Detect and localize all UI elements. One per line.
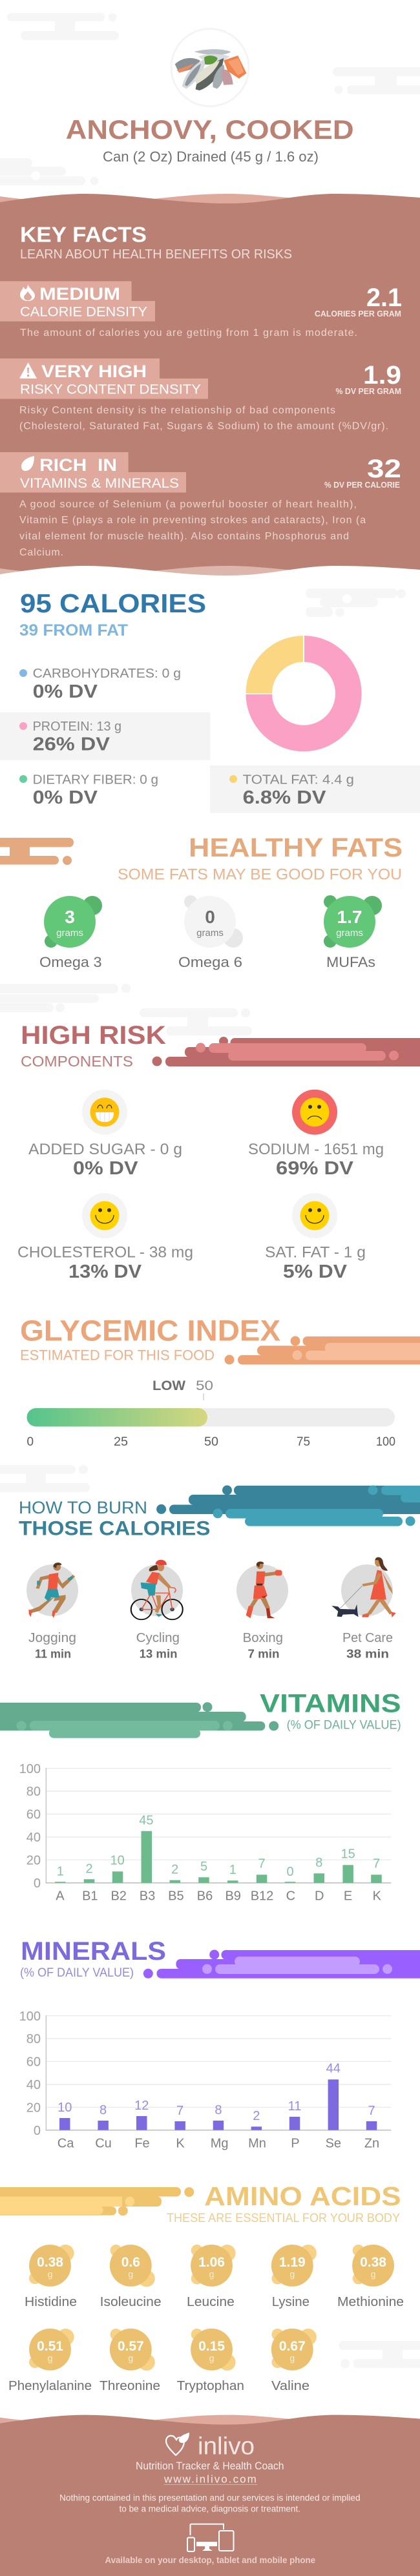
gauge scale: 75 — [297, 1435, 310, 1449]
panel: footer — [0, 2415, 420, 2576]
valine: g — [289, 2353, 295, 2363]
y axis labels: 40 — [26, 2078, 41, 2092]
leucine — [187, 2245, 236, 2309]
lysine: 1.19 — [279, 2255, 306, 2270]
background cloud left — [0, 158, 98, 185]
category labels: Cu — [95, 2136, 112, 2150]
saturated fat: 5% DV — [283, 1262, 348, 1282]
category labels: K — [373, 1889, 382, 1904]
gauge bar — [27, 1408, 395, 1426]
lysine: Lysine — [272, 2295, 310, 2309]
category labels: A — [56, 1889, 65, 1904]
fact: risky content density: % DV PER GRAM — [336, 387, 401, 396]
heading: AMINO ACIDS — [204, 2181, 401, 2211]
activity: pet care — [331, 1557, 396, 1661]
heading: MINERALS — [21, 1937, 166, 1966]
fact: vitamins and minerals: 32 — [367, 455, 401, 483]
category labels: Se — [326, 2136, 341, 2150]
isoleucine: g — [128, 2269, 133, 2279]
methionine — [337, 2245, 404, 2309]
valine: Valine — [271, 2379, 310, 2393]
methionine: g — [371, 2269, 375, 2279]
bars — [55, 1831, 382, 1883]
icon: flame — [20, 284, 35, 301]
fact: vitamins and minerals: VITAMINS & MINERALS — [20, 476, 179, 491]
saturated fat — [265, 1193, 366, 1282]
isoleucine: 0.6 — [121, 2255, 140, 2270]
subheading: COMPONENTS — [21, 1053, 133, 1070]
icon: cyclist — [131, 1560, 183, 1619]
mufas: grams — [336, 928, 363, 939]
top wave back — [0, 194, 295, 213]
activity: pet care: Pet Care — [342, 1631, 393, 1645]
subheading: (% OF DAILY VALUE) — [20, 1966, 134, 1980]
phenylalanine: Phenylalanine — [8, 2379, 92, 2393]
category labels: B9 — [225, 1889, 241, 1904]
lysine — [271, 2245, 317, 2309]
category labels: B12 — [251, 1889, 273, 1904]
food image circle — [171, 28, 249, 106]
cholesterol: CHOLESTEROL - 38 mg — [17, 1244, 193, 1262]
subheading: (% OF DAILY VALUE) — [287, 1719, 401, 1732]
leucine: 1.06 — [198, 2255, 225, 2270]
value labels: 10 — [58, 2101, 72, 2115]
tagline: Nutrition Tracker & Health Coach — [136, 2460, 284, 2472]
phenylalanine: g — [48, 2353, 52, 2363]
background cloud — [306, 588, 406, 617]
valine: 0.67 — [279, 2339, 306, 2354]
icon: grinning face — [90, 1097, 119, 1127]
added sugar — [28, 1090, 182, 1179]
panel: header — [0, 13, 420, 185]
subheading: THESE ARE ESSENTIAL FOR YOUR BODY — [167, 2212, 400, 2225]
heading line 2: THOSE CALORIES — [19, 1516, 211, 1539]
fact: calorie density: CALORIE DENSITY — [20, 305, 147, 320]
y axis labels: 60 — [26, 2055, 41, 2070]
mufas: 1.7 — [337, 907, 362, 927]
band background — [0, 194, 420, 578]
omega 3 — [39, 896, 102, 970]
disclaimer: to be a medical advice, diagnosis or treatment. — [119, 2504, 300, 2514]
sodium: SODIUM - 1651 mg — [248, 1141, 384, 1158]
fact: vitamins and minerals: % DV PER CALORIE — [324, 481, 400, 490]
icon: boxer — [246, 1561, 282, 1618]
decoration — [0, 2187, 194, 2216]
category labels: B5 — [168, 1889, 184, 1904]
threonine: Threonine — [100, 2379, 160, 2393]
legend: dietary fiber: DIETARY FIBER: 0 g — [33, 773, 158, 787]
y axis labels: 20 — [26, 1854, 41, 1868]
value labels: 2 — [85, 1862, 93, 1876]
title: ANCHOVY, COOKED — [66, 114, 354, 145]
donut chart — [246, 636, 362, 751]
gauge scale: 100 — [376, 1435, 395, 1449]
gauge reading: LOW — [152, 1378, 185, 1393]
value labels: 15 — [341, 1847, 355, 1862]
y axis labels: 40 — [26, 1831, 41, 1845]
legend: carbohydrates: 0% DV — [33, 681, 98, 702]
fact: risky content density: 1.9 — [363, 361, 401, 390]
value labels: 5 — [200, 1860, 207, 1874]
heading: HIGH RISK — [21, 1021, 167, 1050]
omega 3: Omega 3 — [39, 954, 102, 970]
category labels: E — [344, 1889, 352, 1904]
availability note: Available on your desktop, tablet and mobile phone — [105, 2555, 315, 2565]
methionine: 0.38 — [360, 2255, 386, 2270]
isoleucine — [100, 2245, 162, 2309]
heading: VITAMINS — [260, 1690, 401, 1718]
icon: sad face — [300, 1097, 330, 1127]
value labels: 2 — [171, 1862, 178, 1876]
icon: devices — [187, 2524, 234, 2551]
y axis labels — [19, 2010, 41, 2138]
subheading: 39 FROM FAT — [19, 621, 128, 639]
disclaimer — [59, 2493, 361, 2514]
cholesterol: 13% DV — [68, 1262, 142, 1282]
icon: woman walking dog — [331, 1557, 396, 1617]
histidine: g — [48, 2269, 52, 2279]
decoration — [0, 1702, 278, 1738]
value labels: 1 — [57, 1864, 64, 1878]
decoration — [143, 1949, 420, 1979]
y axis labels: 20 — [26, 2101, 41, 2115]
website link: www.inlivo.com — [163, 2473, 257, 2485]
category labels: P — [291, 2136, 300, 2150]
category labels: Ca — [58, 2136, 74, 2150]
gauge scale — [27, 1435, 395, 1449]
panel: how to burn — [0, 1465, 420, 1661]
threonine — [100, 2329, 160, 2393]
heading: 95 CALORIES — [20, 588, 206, 618]
legend: carbohydrates: CARBOHYDRATES: 0 g — [33, 667, 181, 681]
value labels: 0 — [286, 1865, 294, 1879]
category labels: D — [315, 1889, 324, 1904]
leucine: Leucine — [187, 2295, 235, 2309]
bars — [59, 2079, 377, 2130]
background cloud right — [333, 67, 420, 94]
fact: risky content density: (Cholesterol, Saturated Fat, Sugars & Sodium) to the amount (%DV/gr). — [19, 421, 388, 432]
bottom wave back — [0, 566, 295, 579]
value labels: 10 — [110, 1854, 125, 1868]
value labels: 8 — [215, 2103, 222, 2117]
methionine: Methionine — [337, 2295, 404, 2309]
icon: fish — [175, 49, 246, 90]
heading: KEY FACTS — [20, 223, 147, 247]
activity: cycling: Cycling — [136, 1631, 180, 1645]
bottom wave front — [0, 566, 420, 579]
legend: total fat: TOTAL FAT: 4.4 g — [243, 773, 354, 787]
omega 6: Omega 6 — [178, 954, 242, 970]
value labels: 2 — [253, 2109, 260, 2123]
tryptophan: 0.15 — [198, 2339, 225, 2354]
background clouds — [0, 984, 252, 1035]
legend: protein: 26% DV — [33, 734, 110, 755]
category labels: Fe — [134, 2136, 150, 2150]
panel: minerals — [19, 1937, 420, 2150]
tryptophan — [177, 2329, 244, 2393]
decoration — [156, 1486, 420, 1526]
fact: vitamins and minerals: Calcium. — [19, 547, 63, 558]
cholesterol — [17, 1193, 193, 1282]
category labels: Zn — [364, 2136, 379, 2150]
fact: vitamins and minerals: Vitamin E (plays a role in preventing strokes and cataracts), Iron (a — [19, 515, 366, 526]
value labels: 44 — [326, 2062, 341, 2076]
activity: pet care: 38 min — [346, 1648, 389, 1661]
activity: boxing: 7 min — [248, 1648, 279, 1661]
fact: calorie density: CALORIES PER GRAM — [315, 309, 401, 318]
omega 6: grams — [196, 928, 224, 939]
panel: vitamins — [0, 1690, 401, 1904]
y axis labels: 0 — [34, 2124, 41, 2138]
activity: boxing — [236, 1561, 288, 1661]
footer wave back — [0, 2415, 295, 2434]
gauge scale: 0 — [27, 1435, 34, 1449]
subheading: ESTIMATED FOR THIS FOOD — [20, 1347, 215, 1364]
logo: inlivo — [198, 2433, 255, 2460]
omega 6 — [178, 895, 243, 970]
y axis labels: 80 — [26, 1785, 41, 1799]
heading line 1: HOW TO BURN — [19, 1498, 147, 1517]
value labels: 45 — [139, 1813, 154, 1827]
tryptophan: Tryptophan — [177, 2379, 244, 2393]
sodium: 69% DV — [276, 1158, 354, 1179]
logo — [166, 2433, 255, 2460]
activity: jogging: Jogging — [28, 1631, 76, 1645]
decoration — [225, 1336, 420, 1364]
legend: carbohydrates — [19, 667, 181, 702]
value labels: 7 — [368, 2104, 375, 2118]
value labels: 12 — [134, 2099, 149, 2113]
legend: dietary fiber — [19, 773, 158, 808]
bar chart: minerals — [19, 2010, 391, 2150]
legend: total fat — [229, 773, 354, 808]
fact: risky content density: RISKY CONTENT DENSITY — [20, 382, 201, 397]
omega 6: 0 — [205, 907, 215, 927]
tryptophan: g — [209, 2353, 214, 2363]
category labels: Mn — [248, 2136, 266, 2150]
panel: calories — [0, 588, 420, 813]
value labels: 1 — [229, 1863, 236, 1877]
fact: vitamins and minerals — [0, 452, 401, 558]
value labels: 7 — [373, 1857, 380, 1871]
value labels: 7 — [258, 1857, 266, 1871]
panel: amino acids — [0, 2181, 420, 2393]
panel: key facts — [0, 194, 420, 579]
gauge scale: 50 — [204, 1435, 218, 1449]
decoration — [0, 838, 74, 865]
mufas — [324, 895, 382, 970]
activity: boxing: Boxing — [243, 1631, 283, 1645]
added sugar: ADDED SUGAR - 0 g — [28, 1141, 182, 1158]
icon: heart with leaf — [166, 2433, 189, 2455]
fact: calorie density — [0, 281, 402, 338]
panel: healthy fats — [0, 833, 403, 970]
value labels: 8 — [315, 1856, 322, 1870]
category labels: B2 — [110, 1889, 127, 1904]
fact: risky content density — [0, 358, 401, 432]
category labels: K — [176, 2136, 185, 2150]
mufas: MUFAs — [326, 954, 375, 970]
icon: smiling face — [90, 1201, 119, 1230]
legend: dietary fiber: 0% DV — [33, 787, 98, 808]
fact: risky content density: Risky Content density is the relationship of bad components — [19, 405, 335, 416]
background cloud — [0, 1465, 90, 1492]
activity: jogging: 11 min — [35, 1648, 71, 1661]
category labels — [58, 2136, 379, 2150]
category labels: Mg — [211, 2136, 228, 2150]
fact: vitamins and minerals: RICH IN — [39, 455, 117, 475]
fact: calorie density: 2.1 — [366, 284, 402, 312]
y axis labels: 60 — [26, 1807, 41, 1822]
gauge scale: 25 — [114, 1435, 128, 1449]
sodium — [248, 1090, 384, 1179]
value labels: 8 — [100, 2103, 107, 2117]
footer band — [0, 2415, 420, 2576]
activity: cycling: 13 min — [140, 1648, 177, 1661]
y axis labels: 80 — [26, 2032, 41, 2046]
fact: vitamins and minerals: A good source of Selenium (a powerful booster of heart health), — [19, 499, 357, 510]
y axis labels — [19, 1762, 41, 1891]
y axis labels: 100 — [19, 2010, 41, 2024]
serving size: Can (2 Oz) Drained (45 g / 1.6 oz) — [103, 149, 319, 165]
category labels: C — [286, 1889, 295, 1904]
histidine: 0.38 — [37, 2255, 63, 2270]
value labels: 11 — [288, 2099, 301, 2114]
icon: leaf — [21, 456, 34, 471]
category labels: B6 — [197, 1889, 213, 1904]
histidine — [25, 2245, 77, 2309]
lysine: g — [289, 2269, 295, 2279]
gauge reading: 50 — [196, 1378, 213, 1393]
histidine: Histidine — [25, 2295, 77, 2309]
background cloud top left — [7, 13, 119, 40]
y axis labels: 0 — [34, 1876, 41, 1891]
fact: calorie density: The amount of calories you are getting from 1 gram is moderate. — [20, 327, 357, 338]
activity: jogging — [26, 1563, 78, 1661]
value labels: 7 — [176, 2104, 184, 2118]
isoleucine: Isoleucine — [100, 2295, 162, 2309]
icon: smiling face — [300, 1201, 330, 1230]
phenylalanine — [8, 2329, 92, 2393]
icon: warning triangle — [19, 362, 37, 379]
omega 3: grams — [56, 928, 83, 939]
bar chart: vitamins — [19, 1762, 391, 1904]
icon: jogger — [28, 1563, 75, 1618]
decoration — [152, 1037, 420, 1066]
subheading: SOME FATS MAY BE GOOD FOR YOU — [118, 866, 402, 884]
gauge reading — [152, 1378, 213, 1400]
panel: high risk — [0, 984, 420, 1282]
category labels — [56, 1889, 382, 1904]
valine — [271, 2329, 317, 2393]
legend: total fat: 6.8% DV — [243, 787, 326, 808]
phenylalanine: 0.51 — [37, 2339, 63, 2354]
subheading: LEARN ABOUT HEALTH BENEFITS OR RISKS — [20, 247, 292, 262]
saturated fat: SAT. FAT - 1 g — [265, 1244, 366, 1262]
value labels — [57, 1813, 380, 1879]
category labels: B3 — [140, 1889, 155, 1904]
y axis labels: 100 — [19, 1762, 41, 1776]
panel: glycemic index — [20, 1314, 420, 1449]
fact: vitamins and minerals: vital element for muscle health). Also contains Phosphorus and — [19, 531, 349, 542]
activity: cycling — [131, 1560, 183, 1661]
legend: protein — [19, 720, 121, 755]
legend row backgrounds — [0, 712, 420, 813]
fact: risky content density: VERY HIGH — [41, 362, 147, 381]
threonine: g — [128, 2353, 133, 2363]
added sugar: 0% DV — [73, 1158, 138, 1179]
leucine: g — [209, 2269, 214, 2279]
category labels: B1 — [82, 1889, 98, 1904]
heading: GLYCEMIC INDEX — [20, 1314, 280, 1347]
background cloud — [339, 2341, 420, 2368]
threonine: 0.57 — [118, 2339, 144, 2354]
legend: protein: PROTEIN: 13 g — [33, 720, 121, 734]
omega 3: 3 — [65, 907, 75, 927]
fact: calorie density: MEDIUM — [39, 284, 120, 304]
disclaimer: Nothing contained in this presentation and our services is intended or implied — [59, 2493, 361, 2503]
heading: HEALTHY FATS — [189, 833, 403, 862]
value labels — [58, 2062, 375, 2123]
